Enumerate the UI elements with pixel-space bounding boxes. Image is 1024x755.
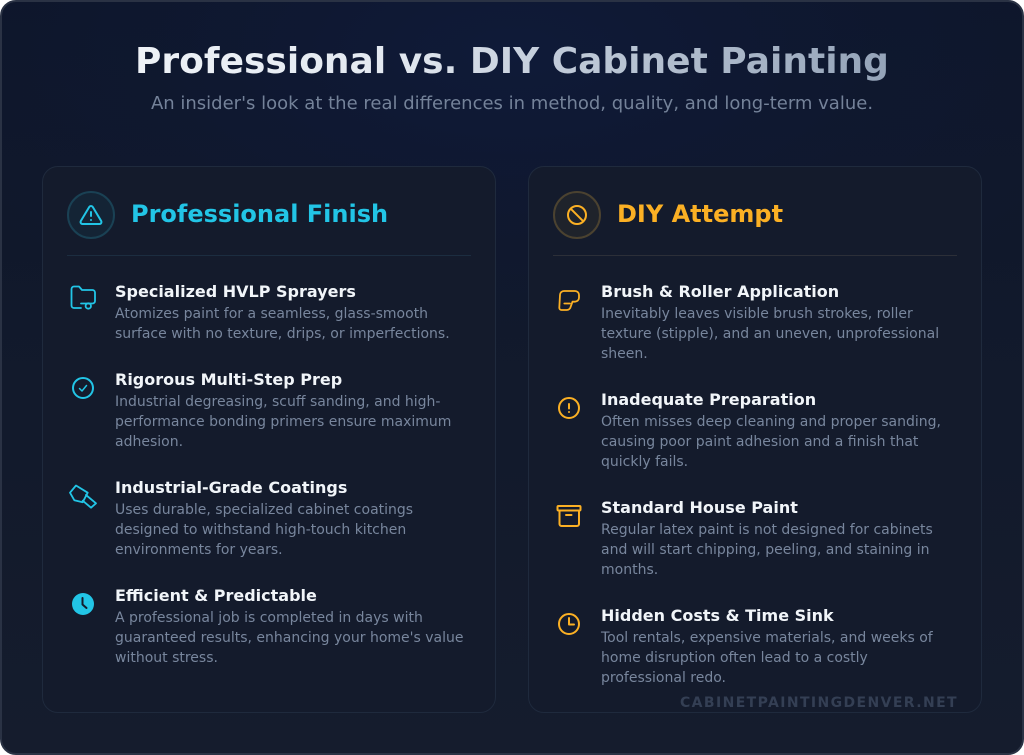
icon: folder spray [70, 286, 96, 310]
title: Professional vs. DIY Cabinet Painting [135, 41, 889, 82]
item text: without stress. [115, 650, 218, 666]
watermark: CABINETPAINTINGDENVER.NET [680, 695, 958, 711]
item: multi-step prep [72, 370, 451, 450]
item title: Specialized HVLP Sprayers [115, 282, 356, 301]
item: hidden costs [558, 606, 933, 686]
item: efficient [72, 586, 463, 666]
icon: ban badge [553, 191, 601, 239]
item text: and will start chipping, peeling, and staining in [601, 542, 930, 558]
item text: professional redo. [601, 670, 726, 686]
item text: Uses durable, specialized cabinet coatings [115, 502, 413, 518]
item text: Industrial degreasing, scuff sanding, and high- [115, 394, 440, 410]
item text: Inevitably leaves visible brush strokes, roller [601, 306, 913, 322]
item text: sheen. [601, 346, 648, 362]
item text [600, 630, 933, 686]
item text: surface with no texture, drips, or imperfections. [115, 326, 450, 342]
item text: texture (stipple), and an uneven, unprofessional [601, 326, 939, 342]
item text [115, 306, 450, 342]
item text: guaranteed results, enhancing your home's value [115, 630, 463, 646]
panel: professional finish [42, 166, 496, 713]
icon: brush tool [69, 484, 97, 509]
item text: A professional job is completed in days with [115, 610, 423, 626]
icon: clock [558, 613, 580, 635]
item text: causing poor paint adhesion and a finish that [601, 434, 918, 450]
item title: Inadequate Preparation [601, 390, 816, 409]
subtitle: An insider's look at the real differences in method, quality, and long-term value. [151, 93, 873, 114]
item title: Industrial-Grade Coatings [115, 478, 347, 497]
item text [601, 414, 941, 470]
item: inadequate prep [558, 390, 941, 470]
icon: alert circle [558, 397, 580, 419]
icon: archive box [556, 505, 582, 527]
item text [115, 394, 451, 450]
heading: professional finish: Professional Finish [131, 200, 388, 228]
item title: Brush & Roller Application [601, 282, 839, 301]
item: house paint [556, 498, 933, 578]
item text: Atomizes paint for a seamless, glass-smooth [115, 306, 428, 322]
panel: DIY attempt [528, 166, 982, 713]
item text: Regular latex paint is not designed for cabinets [601, 522, 933, 538]
item text [115, 610, 463, 666]
item: industrial coatings [69, 478, 413, 558]
heading: DIY attempt: DIY Attempt [617, 200, 783, 228]
item: HVLP sprayers [70, 282, 450, 342]
icon: warning badge [67, 191, 115, 239]
item text [601, 522, 933, 578]
icon: roller [558, 290, 580, 311]
icon: solid clock [72, 593, 94, 615]
item text: home disruption often lead to a costly [601, 650, 868, 666]
item text: adhesion. [115, 434, 183, 450]
item text: performance bonding primers ensure maximum [115, 414, 451, 430]
item title: Standard House Paint [601, 498, 798, 517]
item title: Rigorous Multi-Step Prep [115, 370, 342, 389]
item: brush and roller [558, 282, 939, 362]
item text [115, 502, 413, 558]
item title: Efficient & Predictable [115, 586, 317, 605]
item title: Hidden Costs & Time Sink [601, 606, 834, 625]
item text: Tool rentals, expensive materials, and weeks of [601, 630, 933, 646]
item text: environments for years. [115, 542, 283, 558]
icon: check circle [72, 377, 94, 399]
item text: months. [601, 562, 658, 578]
item text: quickly fails. [601, 454, 688, 470]
item text: Often misses deep cleaning and proper sanding, [601, 414, 941, 430]
item text: designed to withstand high-touch kitchen [115, 522, 406, 538]
item text [601, 306, 939, 362]
